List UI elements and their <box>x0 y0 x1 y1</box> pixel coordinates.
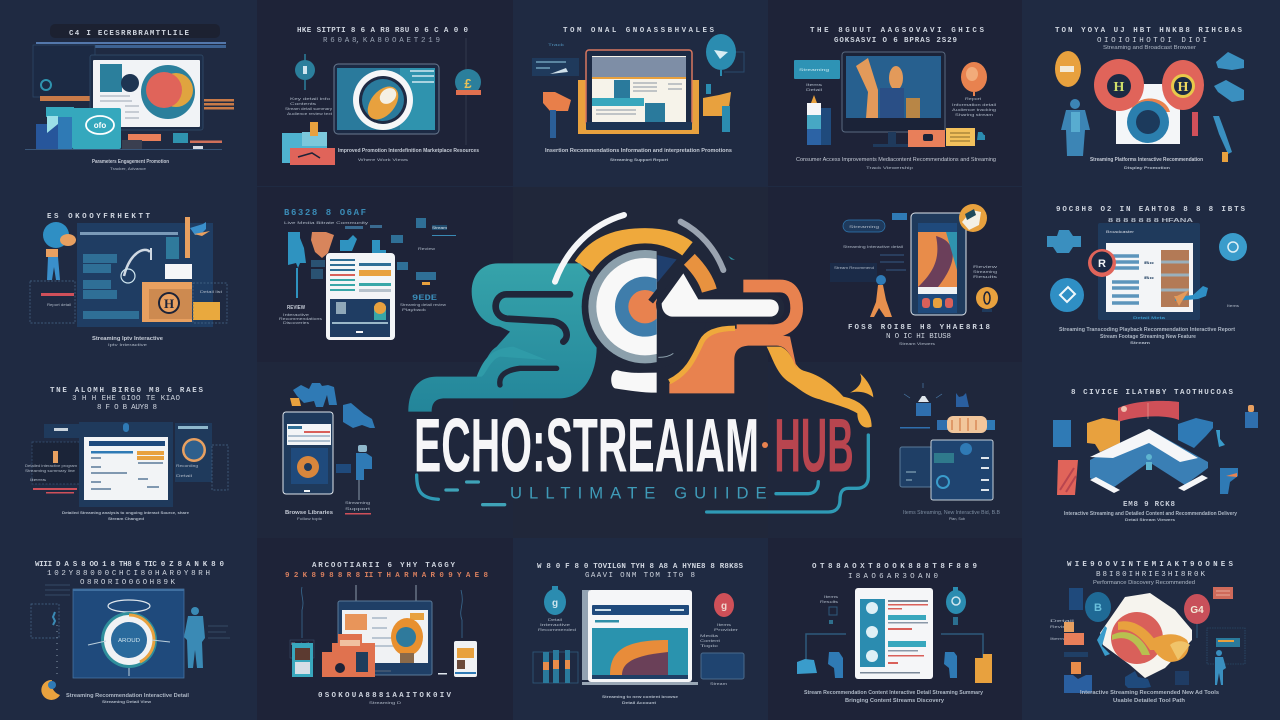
title <box>414 404 854 489</box>
panel: bottom row 4 <box>797 563 992 704</box>
panel: bottom row 2: 9 2 K 8 9 8 8 R 8 II T H A R M A R 0 9 Y A E 8 <box>285 572 488 580</box>
panel: row 2 left: Iptv Interactive <box>108 342 148 347</box>
callout: Detail <box>806 87 822 92</box>
figure left <box>543 92 571 138</box>
connectors <box>806 634 983 660</box>
caption: Consumer Access Improvements Mediacontent Recommendations and Streaming <box>796 157 996 163</box>
panel: bottom row 2: Streaming D <box>369 700 401 705</box>
text block <box>973 264 997 279</box>
text block: Discoveries <box>283 320 309 325</box>
icon: folder: ofo <box>94 121 106 130</box>
box badge <box>142 282 220 322</box>
text block: Stream detail summary <box>285 106 332 111</box>
connectors: Details <box>291 641 313 646</box>
caption: 0 S O K O U A 8 8 8 1 A A I T O K 0 I V <box>318 692 451 700</box>
screen: Bo <box>1144 260 1155 265</box>
diamond <box>1097 593 1192 678</box>
heading: TNE ALOMH BIRG0 M8 6 RAES <box>50 387 203 395</box>
dark tablet: Stream <box>710 681 728 686</box>
hand <box>870 275 892 317</box>
figure <box>282 122 335 165</box>
card <box>855 588 933 679</box>
icon: badge <box>1088 249 1116 277</box>
panel: bottom row 1: Streaming Detail View <box>102 699 152 704</box>
panel: top row 5 <box>1055 27 1244 170</box>
panel: row 3 col 2 <box>283 383 375 521</box>
bars <box>533 650 578 683</box>
panel: bottom row 4: Bringing Content Streams Discovery <box>845 698 944 704</box>
panel: row 3 col 1: 3 H H EHE GIOO TE KIAO <box>72 395 180 403</box>
right panel: Detail <box>176 473 192 478</box>
tablet <box>326 253 395 340</box>
caption: Streaming Transcoding Playback Recommendation Interactive Report <box>1059 327 1235 333</box>
eyes <box>1055 51 1204 111</box>
heading: TON YOYA UJ HBT HNKB8 RIHCBAS <box>1055 27 1242 35</box>
icon: balloon left: Recommended <box>538 627 576 632</box>
figures: Results <box>820 599 838 604</box>
text block: Information detail <box>952 102 996 107</box>
icon: balloon left: g <box>552 598 558 609</box>
left panel: Streaming summary line <box>25 468 76 473</box>
callout: Items <box>806 82 822 87</box>
side details: 9EDE <box>412 294 437 303</box>
panel: row 3 col 5: Detail Stream Viewers <box>1125 517 1176 522</box>
caption: Improved Promotion Interdefinition Marketplace Resources <box>338 148 479 154</box>
icons left: B <box>1094 602 1102 614</box>
panel: bottom row 5: Performance Discovery Recommended <box>1093 580 1195 586</box>
panel: row 3 col 1: Stream Changed <box>108 516 145 521</box>
side details: Playback <box>402 307 426 312</box>
icons left: Review <box>1050 624 1070 629</box>
icon: balloon left: Interactive <box>540 622 571 627</box>
panel: top row 4: Track Viewership <box>866 165 914 170</box>
panel: row 3 col 1 <box>25 387 228 521</box>
screen <box>90 55 203 130</box>
box badge: H <box>164 296 174 311</box>
caption: Items Streaming, New Interactive Bid, B.B <box>903 510 1001 516</box>
icon: badge top <box>959 204 987 232</box>
caption: Parameters Engagement Promotion <box>92 159 170 165</box>
panel: bottom row 3 <box>533 563 744 705</box>
panel: row 2 col 5: Stream Footage Streaming New Feature <box>1100 334 1196 340</box>
heading: C4 I ECESRRBRAMTTLILE <box>69 30 189 38</box>
figures: Items <box>824 594 838 599</box>
subtitle: ULLTIMATE GUIIDE <box>510 484 767 503</box>
icons right <box>1192 52 1244 162</box>
screen: Bo <box>1144 275 1155 280</box>
icons left: Detail <box>1050 618 1074 623</box>
figures <box>797 594 992 683</box>
icon: balloon <box>1184 594 1210 638</box>
panel: row 3 col 4 <box>900 383 1001 521</box>
side details: Streaming detail review <box>400 302 446 307</box>
heading: WIII D A S 8 OO 1 8 TH8 6 TIC 0 Z 8 A N K 8 0 <box>35 561 224 569</box>
icon: teal S wave <box>408 263 597 412</box>
dashed callouts <box>30 281 227 323</box>
puzzle and note <box>908 128 985 147</box>
heading: B6328 8 O6AF <box>284 208 366 218</box>
icon: pole <box>185 217 210 258</box>
screen <box>73 589 184 678</box>
panel: top row 4 <box>794 27 996 170</box>
heading: TOM ONAL GNOASSBHVALES <box>563 27 714 35</box>
panel: row 2 col 4: N O IC HI BIUS8 <box>886 333 951 341</box>
icon: balloon: G4 <box>1190 605 1204 616</box>
logo: centre lockup: HUB <box>774 404 854 489</box>
text block: Audience tracking <box>952 107 996 112</box>
panel: bottom row 1 <box>31 561 230 704</box>
logo: centre lockup <box>408 215 873 512</box>
callouts <box>830 213 907 282</box>
icon: balloon <box>706 34 744 76</box>
red pill <box>1118 401 1179 422</box>
monitor <box>842 52 945 147</box>
icons left <box>1050 588 1111 693</box>
text block: Streaming <box>973 269 997 274</box>
icon: folder <box>36 107 121 149</box>
laptop <box>578 50 699 134</box>
heading: FOS8 ROI8E H8 YHAE8R18 <box>848 324 990 332</box>
panel: top row 3: Streaming Support Report <box>610 157 669 162</box>
icon: balloon left <box>538 586 576 632</box>
text block: Key detail info <box>290 96 331 101</box>
heading: 9OC8H8 O2 IN EAHTO8 8 8 8 IBTS <box>1056 206 1245 214</box>
icon: balloon right: Topic <box>700 643 718 648</box>
screen: Broadcaster <box>1106 229 1135 234</box>
text block: Interactive <box>283 312 310 317</box>
panel: row 2 col 5 <box>1047 206 1247 345</box>
panel: row 2 col 5: 8 8 8 8 8 8 8 HFANA <box>1108 218 1194 224</box>
figure <box>1061 99 1090 156</box>
screen <box>1098 223 1200 320</box>
panel: bottom row 2 <box>285 562 488 705</box>
caption: Streaming Platforms Interactive Recommendation <box>1090 157 1204 163</box>
tablet <box>283 412 333 494</box>
left panel <box>25 424 80 494</box>
dashed callouts: Detail list <box>200 289 223 294</box>
icon: balloon left: Detail <box>548 617 562 622</box>
icons top <box>290 383 375 428</box>
panel: bottom row 5: Usable Detailed Tool Path <box>1113 698 1185 704</box>
heading: O T 8 8 A O X T 8 O O K 8 8 8 T 8 F 8 8 9 <box>812 563 977 571</box>
text block: Audience review text <box>287 111 333 116</box>
icons around: Items <box>1227 303 1239 308</box>
heading: 8 CIVICE ILATHBY TAOTHUCOAS <box>1071 389 1233 397</box>
icon: white pointer <box>611 246 779 393</box>
bottle: Support <box>345 506 372 511</box>
panel: row 2 col 5: Stream <box>1130 340 1151 345</box>
panel: top row 5: Streaming and Broadcast Browser <box>1103 45 1196 51</box>
icon: balloon right: Content <box>700 638 721 643</box>
icons left: Item <box>1050 636 1065 641</box>
icon: coin <box>976 287 998 312</box>
panel: bottom row 3: Detail Account <box>622 700 657 705</box>
left panel: Detailed interactive program <box>25 463 78 468</box>
device orange <box>322 634 375 677</box>
panel: row 2 left <box>30 213 227 347</box>
callout <box>794 60 840 92</box>
icon: pound coin: £ <box>464 76 472 91</box>
text block <box>285 96 333 116</box>
icons around <box>1047 230 1247 312</box>
icon: target rings <box>582 243 682 364</box>
icon: pound coin <box>455 69 481 95</box>
right panel <box>175 423 228 490</box>
callouts: Streaming Interactive detail <box>843 244 903 249</box>
text block: Review <box>973 264 997 269</box>
podium <box>900 383 969 428</box>
icon: balloon right: Media <box>700 633 719 638</box>
text block: REVIEW <box>287 305 306 311</box>
caption: Stream Viewers <box>899 341 935 346</box>
ribbon <box>1090 429 1208 493</box>
caption: Streaming to new content browse <box>602 694 679 699</box>
panel: top row 5: Display Promotion <box>1124 165 1171 170</box>
bottle: Streaming <box>345 500 370 505</box>
panel: top row 2: R 6 0 A 8, K A 8 0 O A E T 2 1 9 <box>323 37 440 45</box>
icon: outer arcs <box>555 215 735 291</box>
screen: AROUD <box>118 638 140 644</box>
phone <box>911 213 966 315</box>
right panel: Recording <box>176 463 198 468</box>
laptop <box>338 601 432 675</box>
dark tablet <box>701 653 744 686</box>
panel: row 3 col 4: Plan, Sub <box>949 516 966 521</box>
panel: top row 1: Tracker, Advance <box>110 166 147 171</box>
figure right <box>703 84 731 132</box>
callout: Streaming <box>799 67 829 72</box>
screen: Detail Meta <box>1133 315 1166 320</box>
screen <box>79 422 173 507</box>
left panel: Items <box>30 477 46 482</box>
icon: badge: R <box>1098 258 1106 270</box>
panel: top row 2 <box>282 27 481 165</box>
panel: top row 3 <box>532 27 744 162</box>
figure <box>43 222 76 280</box>
heading: W I E 9 O O V I N T E M I A K T 9 O O N E S <box>1067 561 1233 569</box>
caption: Interactive Streaming and Detailed Content and Recommendation Delivery <box>1064 511 1237 517</box>
callout: Track <box>548 42 564 47</box>
centre badge <box>1116 84 1180 144</box>
panel: top row 4: GOKSASVI O 6 BPRAS 2S29 <box>834 37 957 45</box>
panel: top row 1 <box>25 24 234 171</box>
text block <box>952 96 996 117</box>
heading: W 8 0 F 8 0 TOVILGN TYH 8 A8 A HYNE8 8 R8K8S <box>537 563 743 571</box>
heading: ES OKOOYFRHEKTT <box>47 213 150 221</box>
callouts: Streaming <box>849 224 879 229</box>
text block: Sharing stream <box>955 112 994 117</box>
left annotation <box>31 585 70 700</box>
panel: bottom row 5: B 8 I 8 0 I H R I E 3 H I 8 R 0 K <box>1096 571 1205 579</box>
icon: orange R <box>669 286 873 428</box>
text block: Contents <box>290 101 316 106</box>
heading: THE 8GUUT AAGSOVAVI GHICS <box>810 27 984 35</box>
icon: balloon <box>961 62 987 96</box>
text block: Results <box>973 274 997 279</box>
side cards <box>1057 460 1238 495</box>
eyes: H <box>1178 80 1189 95</box>
text block: Report <box>965 96 982 101</box>
heading: ARCOOTIARII 6 YHY TAGGY <box>312 562 455 570</box>
panel: bottom row 1: O 8 R O R I O 0 6 O H 8 9 K <box>80 579 175 587</box>
tablet <box>334 64 439 134</box>
dashed callouts: Report detail <box>47 302 71 307</box>
phone <box>438 641 477 677</box>
icon: balloon <box>946 587 966 625</box>
caption: Interactive Streaming Recommended New Ad Tools <box>1080 690 1219 696</box>
caption: Insertion Recommendations Information and interpretation Promotions <box>545 148 732 154</box>
panel: row 3 col 1: 8 F O B AUY8 8 <box>97 404 157 412</box>
caption: Stream Recommendation Content Interactive Detail Streaming Summary <box>804 690 983 696</box>
tag <box>1213 587 1233 599</box>
text block <box>279 305 322 325</box>
figure and panel <box>1125 628 1245 688</box>
callout <box>532 42 579 76</box>
caption: Streaming Iptv Interactive <box>92 336 163 342</box>
panel: row 3 col 5 <box>1053 389 1258 522</box>
laptop <box>582 590 698 685</box>
chips <box>311 235 408 279</box>
panel: row 2 col 2: Live Media Bitrate Community <box>284 220 368 225</box>
side details <box>400 218 456 312</box>
panel: bottom row 4: I 8 A O 6 A R 3 O A N 0 <box>848 573 938 581</box>
panel: bottom row 5 <box>1050 561 1245 704</box>
icon: pin left <box>295 54 315 90</box>
panel: top row 5: OIOIOIHOTOI DIOI <box>1097 37 1207 45</box>
icon: balloon right: g <box>721 601 727 612</box>
figure <box>807 95 831 145</box>
sub-heading: EM8 9 RCK8 <box>1123 501 1175 509</box>
title: ECHO:STREAIAM <box>414 404 759 489</box>
caption: Detailed Streaming analysis to ongoing interact Source, share <box>62 510 190 515</box>
tablets <box>900 440 993 500</box>
callouts: Stream Recommend <box>834 265 874 270</box>
panel: row 2 col 2 <box>279 208 456 340</box>
caption: Browse Libraries <box>285 510 333 516</box>
teal tablet <box>292 643 313 677</box>
outline <box>417 435 868 512</box>
panel: row 2 col 4 <box>830 204 998 346</box>
handshake <box>937 416 995 433</box>
bottle <box>336 445 372 514</box>
figure <box>184 607 230 668</box>
icon: balloon right <box>700 593 739 648</box>
heading: HKE SITPTI 8 6 A R8 R8U 0 6 C A 0 0 <box>297 27 468 35</box>
panel: row 3 col 2: Follow topic <box>297 516 322 521</box>
figures <box>288 225 386 298</box>
icon: balloon right: Items <box>717 622 731 627</box>
eyes: H <box>1114 80 1125 95</box>
caption: Streaming Recommendation Interactive Detail <box>66 693 190 699</box>
hexes <box>1053 405 1258 452</box>
icon: balloon right: Provider <box>714 627 739 632</box>
side details: Stream <box>432 225 448 230</box>
connectors <box>290 585 462 658</box>
icon: yellow arc <box>584 239 686 267</box>
panel: bottom row 1: 1 0 2 Y 8 8 0 0 0 C H C I 8 0 H A R 0 Y 8 R H <box>47 570 210 578</box>
panel: bottom row 3: GAAVI ONM TOM IT0 8 <box>585 572 695 580</box>
side details: Review <box>418 246 435 251</box>
text block: Recommendations <box>279 316 322 321</box>
panel: top row 2: Where Work Views <box>358 157 408 162</box>
dashboard <box>77 223 213 327</box>
